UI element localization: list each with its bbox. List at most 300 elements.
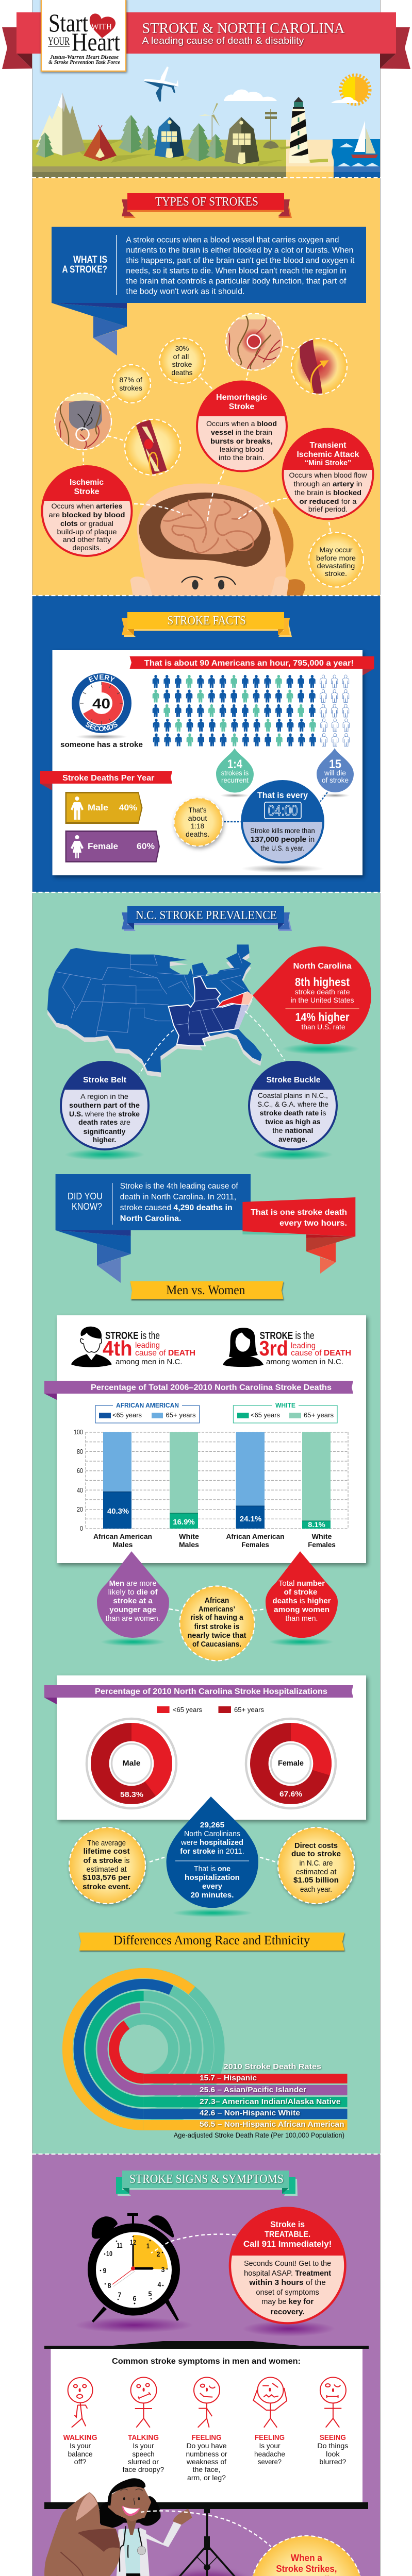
bubble: lifetime cost: The average (87, 1839, 126, 1848)
bubble: when a stroke strikes (251, 2536, 362, 2576)
icon: burst artery (291, 338, 347, 394)
text: seeing: look (326, 2450, 340, 2458)
icon: ground shadows (72, 139, 309, 166)
bar: African American females (236, 1432, 265, 1529)
bubble: African Americans first stroke risk: nearly twice that (188, 1632, 246, 1640)
drop: North Carolina statistics: 14% higher (295, 1010, 350, 1024)
bubble: African Americans first stroke risk: risk of having a (190, 1614, 244, 1622)
legend: African American: 65+ years (166, 1411, 196, 1419)
card: stroke facts (53, 650, 362, 875)
oval: hemorrhagic stroke: Hemorrhagic (216, 393, 267, 402)
text: talking: slurred or (128, 2458, 159, 2466)
callout: did you know: DID YOU (68, 1191, 103, 1201)
oval: stroke belt: southern part of the (69, 1101, 140, 1109)
oval: hemorrhagic stroke: vessel in the brain (211, 428, 272, 436)
bubble: 30 percent of stroke deaths: 30% (175, 344, 189, 352)
region: stroke buckle (234, 1005, 249, 1029)
icon: stick figure numbness (194, 2377, 220, 2428)
bar: White females: 8.1% (308, 1520, 325, 1529)
oval: stroke is treatable: Call 911 Immediately! (243, 2240, 332, 2249)
icon: ischemic brain vessels (55, 393, 112, 452)
drop: North Carolina statistics: in the United States (291, 996, 354, 1004)
icon: blue house (155, 117, 184, 158)
oval: ischemic stroke: build-up of plaque (57, 528, 117, 536)
drop: 15 will die of stroke: will die (324, 769, 346, 777)
oval: stroke is treatable: within 3 hours of the (249, 2278, 326, 2287)
bubble: lifetime cost: stroke event. (83, 1883, 130, 1891)
oval: transient ischemic attack: through an artery in (294, 480, 362, 488)
ribbon: about 90 Americans an hour: That is about 90 Americans an hour, 795,000 a year! (144, 659, 354, 668)
banner: men vs. women: Men vs. Women (166, 1283, 245, 1297)
icon: every 40 seconds clock (72, 673, 131, 739)
oval: stroke is treatable: TREATABLE. (265, 2230, 310, 2239)
panel: symptoms screen (44, 2341, 369, 2502)
icon: every 40 seconds clock: SECONDS (86, 722, 118, 732)
panel: sky and landscape background (32, 0, 381, 178)
connector: blue dashes (224, 792, 327, 822)
oval: ischemic stroke: deposits. (72, 544, 101, 552)
icon: mountain (36, 93, 86, 156)
icon: pants and shoes (110, 2572, 150, 2576)
text: feeling numbness: numbness or (186, 2450, 227, 2458)
chart: male donut: Male (123, 1759, 140, 1768)
callout: did you know: death in North Carolina. In 2011, (120, 1193, 236, 1201)
callout: what is a stroke (52, 227, 366, 355)
legend: White (233, 1401, 337, 1423)
text: walking: WALKING (63, 2433, 97, 2442)
icon: presentation screen tripod (161, 2509, 254, 2576)
bubble: 30 percent of stroke deaths: deaths (171, 368, 193, 377)
text: feeling headache: FEELING (255, 2433, 285, 2442)
bar: White males: 16.9% (173, 1518, 195, 1527)
icon: alarm clock: 8 (107, 2281, 111, 2290)
icon: woman silhouette (223, 1328, 263, 1367)
icon: neck (126, 2519, 137, 2535)
banner: types of strokes (122, 193, 292, 218)
drop: North Carolina statistics: 8th highest (295, 975, 350, 989)
text: stroke 4th leading cause among men: cause of DEATH (135, 1349, 195, 1358)
icon: olive house (224, 117, 259, 164)
logo: Start With Your Heart: Justus-Warren Heart Disease (50, 55, 119, 60)
heading: common symptoms: Common stroke symptoms in men and women: (112, 2357, 301, 2366)
ribbon: percentage of stroke deaths (44, 1381, 353, 1400)
icon: face (108, 2487, 151, 2521)
banner: men vs. women (130, 1281, 284, 1299)
icon: female figure (71, 835, 84, 858)
bubble: about 1 in 18 deaths: That's (189, 806, 206, 814)
ribbon: stroke deaths per year: Stroke Deaths Per Year (62, 774, 155, 783)
oval: stroke buckle (248, 1061, 338, 1160)
callout: one stroke death every two hours: That is one stroke death (251, 1208, 347, 1217)
oval: ischemic stroke: are blocked by blood (48, 511, 125, 519)
bubble: 87 percent of strokes: 87% of (120, 376, 142, 384)
oval: stroke is treatable: may be key for (261, 2297, 314, 2306)
bubble: may occur before stroke: devastating (317, 562, 355, 570)
text: feeling numbness: the face, (193, 2466, 220, 2473)
bar: African American females: 24.1% (240, 1515, 261, 1523)
oval: stroke buckle: average. (278, 1135, 307, 1143)
legend: hospitalizations: <65 years (173, 1706, 202, 1714)
drop: North Carolinians hospitalized: hospitalization (185, 1874, 240, 1882)
bubble: African Americans first stroke risk: first stroke is (194, 1623, 239, 1631)
text: stroke 4th leading cause among men: 4th (103, 1336, 133, 1360)
legend: African American (95, 1401, 200, 1423)
panel: prevalence background (32, 892, 381, 2154)
drop: North Carolina statistics (253, 946, 371, 1055)
oval: stroke belt: Stroke Belt (83, 1076, 127, 1084)
oval: stroke buckle: the national (272, 1126, 313, 1134)
oval: stroke is treatable: hospital ASAP. Treatment (244, 2269, 331, 2278)
illustration: North Carolina landscape (36, 66, 379, 166)
oval: stroke is treatable: onset of symptoms (256, 2288, 319, 2297)
oval: transient ischemic attack: Occurs when blood flow (289, 471, 367, 479)
drop: North Carolinians hospitalized: That is one (194, 1865, 230, 1873)
oval: ischemic stroke: Ischemic (70, 478, 104, 487)
oval: stroke buckle: S.C., & G.A. where the (257, 1100, 328, 1108)
icon: pointing hand (44, 2492, 120, 2576)
drop: 1 in 4 strokes recurrent: 1:4 (227, 757, 243, 771)
icon: raised arm (143, 2522, 182, 2547)
drop: men more likely to die younger: likely to die of (108, 1588, 158, 1597)
icon: male figure (71, 796, 84, 820)
text: stroke 4th leading cause among men (103, 1330, 195, 1366)
bubble: 87 percent of strokes: strokes (120, 384, 142, 392)
text: seeing: blurred? (319, 2458, 346, 2466)
oval: that is every four minutes: the U.S. a year. (261, 844, 304, 852)
bar: African American males (103, 1432, 131, 1529)
oval: transient ischemic attack: Transient (309, 441, 347, 450)
oval: ischemic stroke: Occurs when arteries (52, 502, 123, 510)
drop: North Carolinians hospitalized: North Carolinians (184, 1830, 240, 1838)
icon: clouds (224, 90, 277, 101)
oval: stroke buckle: Coastal plains in N.C., (258, 1091, 328, 1099)
callout: did you know: KNOW? (72, 1201, 102, 1212)
banner: stroke signs and symptoms (116, 2171, 298, 2196)
drop: 15 will die of stroke (317, 748, 354, 798)
section dividers (32, 178, 381, 2576)
drop: total deaths higher among women: among women (274, 1606, 329, 1614)
bubble: direct costs: due to stroke (291, 1850, 341, 1858)
oval: hemorrhagic stroke: leaking blood (220, 445, 263, 453)
oval: ischemic stroke: and other fatty (63, 535, 111, 544)
bubble: direct costs: in N.C. are (299, 1859, 333, 1868)
chart: radial death rates by race: 27.3– American Indian/Alaska Native (200, 2097, 340, 2106)
drop: North Carolinians hospitalized: 20 minutes. (191, 1891, 234, 1900)
text: feeling headache (254, 2433, 285, 2466)
callout: one stroke death every two hours (242, 1197, 355, 1274)
chart: stroke deaths stacked bars: African American (226, 1532, 285, 1540)
oval: hemorrhagic stroke: Occurs when a blood (206, 419, 277, 428)
oval: transient ischemic attack: brief period. (308, 505, 348, 513)
drop: men more likely to die younger: stroke at a (113, 1597, 153, 1605)
logo: Start With Your Heart: & Stroke Prevention Task Force (48, 60, 120, 65)
oval: stroke belt (60, 1061, 150, 1160)
banner: stroke facts: STROKE FACTS (167, 614, 246, 628)
text: talking: speech (132, 2450, 155, 2458)
oval: stroke buckle: stroke death rate is (260, 1109, 326, 1117)
bubble: African Americans first stroke risk: African (205, 1597, 229, 1605)
chart: stroke deaths stacked bars: Females (241, 1540, 269, 1549)
text: feeling numbness: Do you have (187, 2442, 227, 2450)
oval: stroke belt: A region in the (80, 1092, 128, 1100)
icon: trees (36, 115, 225, 161)
banner: differences among race and ethnicity (78, 1933, 344, 1951)
drop: total deaths higher among women (266, 1551, 338, 1646)
text: feeling headache: Is your (259, 2442, 281, 2450)
connector: hospitalization bubbles (150, 1857, 276, 1862)
legend: White: WHITE (275, 1401, 295, 1409)
drop: 1 in 4 strokes recurrent (216, 748, 254, 798)
icon: alarm clock: 3 (161, 2265, 165, 2274)
connector: clock to treatable oval (151, 2234, 236, 2253)
bubble: 30 percent of stroke deaths: of all (173, 352, 189, 361)
chart: radial death rates by race (68, 1973, 347, 2139)
logo: Start With Your Heart: YOUR (48, 35, 70, 47)
oval: hemorrhagic stroke (196, 380, 288, 472)
icon: hair top (108, 2478, 145, 2505)
drop: men more likely to die younger (97, 1551, 169, 1646)
tag: male 40 percent: 40% (119, 803, 137, 812)
legend: African American: <65 years (112, 1411, 142, 1419)
bubble: about 1 in 18 deaths (174, 798, 223, 846)
oval: hemorrhagic stroke: bursts or breaks, (210, 437, 273, 445)
bubble: about 1 in 18 deaths: about (188, 814, 207, 822)
illustration: head with exposed brain (130, 484, 305, 596)
bubble: when a stroke strikes: Stroke Strikes, (276, 2564, 337, 2574)
text: stroke 3rd leading cause among women: STROKE is the (260, 1330, 315, 1342)
legend: African American: AFRICAN AMERICAN (116, 1401, 179, 1409)
oval: stroke buckle: twice as high as (265, 1117, 321, 1126)
chart: radial death rates by race: 25.6 – Asian/Pacific Islander (200, 2086, 306, 2094)
icon: alarm clock: 1 (146, 2242, 150, 2250)
icon: lighthouse (288, 97, 328, 163)
text: talking (123, 2433, 164, 2473)
drop: 15 will die of stroke: of stroke (322, 776, 349, 784)
chart: female donut: Female (278, 1759, 304, 1768)
bar: African American males: 40.3% (107, 1507, 129, 1516)
bubble: 30 percent of stroke deaths (160, 338, 205, 383)
callout: one stroke death every two hours: every two hours. (279, 1219, 347, 1228)
bubble: about 1 in 18 deaths: 1:18 (191, 822, 204, 830)
icon: alarm clock: 12 (130, 2238, 136, 2246)
icon: smile (122, 2505, 140, 2516)
connector lines: types of strokes (83, 344, 331, 532)
text: seeing: SEEING (320, 2433, 346, 2442)
ribbon: stroke deaths per year (40, 771, 172, 790)
text: walking: balance (68, 2450, 93, 2458)
callout: did you know: stroke caused 4,290 deaths in (120, 1204, 233, 1212)
text: feeling numbness: arm, or leg? (187, 2474, 226, 2482)
icon: man silhouette (71, 1327, 112, 1367)
icon: eyes and brows (123, 2497, 125, 2500)
ribbon: about 90 Americans an hour (130, 656, 374, 675)
drop: total deaths higher among women: than men. (286, 1615, 318, 1623)
icon: wind turbine (199, 103, 220, 145)
connector: map to belt and buckle (139, 1011, 285, 1074)
bubble: when a stroke strikes: When a (291, 2553, 323, 2563)
arc: Hispanic (114, 2025, 144, 2078)
bubble: about 1 in 18 deaths: deaths. (186, 830, 209, 838)
oval: that is every four minutes: 137,000 people in (251, 836, 315, 844)
ribbon: percentage of hospitalizations: Percentage of 2010 North Carolina Stroke Hospitalizations (95, 1687, 327, 1696)
panel: stroke facts background (32, 596, 381, 892)
arc: American Indian/Alaska Native (91, 1996, 144, 2102)
chart: stroke deaths stacked bars: Males (112, 1540, 133, 1549)
icon: airplane (144, 66, 178, 101)
oval: stroke belt: U.S. where the stroke (69, 1110, 140, 1118)
icon: stick figure blurred vision (320, 2377, 346, 2428)
chart: radial death rates by race: 42.6 – Non-Hispanic White (200, 2109, 300, 2117)
oval: transient ischemic attack: Ischemic Attack (297, 450, 359, 459)
icon: stick figure talking (131, 2377, 157, 2428)
drop: North Carolinians hospitalized: 29,265 (200, 1821, 224, 1829)
drop: North Carolina statistics: North Carolina (293, 962, 352, 971)
text: stroke 3rd leading cause among women (259, 1330, 351, 1366)
icon: stick figure headache (253, 2377, 287, 2428)
bubble: may occur before stroke (309, 533, 364, 587)
tag: female 60 percent: 60% (137, 841, 155, 851)
callout: did you know (56, 1174, 251, 1283)
icon: alarm clock: 10 (106, 2249, 112, 2258)
callout: what is a stroke: A STROKE? (62, 264, 107, 275)
arc: Non-Hispanic African American (68, 1973, 192, 2125)
drop: North Carolinians hospitalized (166, 1797, 258, 1917)
oval: that is every four minutes: Stroke kills more than (250, 827, 315, 835)
oval: ischemic stroke: Stroke (74, 487, 100, 496)
text: walking: off? (74, 2458, 87, 2466)
drop: 1 in 4 strokes recurrent: recurrent (221, 776, 249, 784)
chart: radial death rates by race: 15.7 – Hispanic (200, 2074, 257, 2082)
definition text (126, 236, 355, 296)
drop: total deaths higher among women: deaths is higher (272, 1597, 331, 1605)
bubble: 87 percent of strokes (112, 365, 151, 403)
drop: North Carolina statistics: stroke death rate (295, 988, 350, 996)
bubble: lifetime cost: of a stroke is (84, 1857, 130, 1865)
oval: ischemic stroke: clots or gradual (60, 519, 113, 528)
tag: male 40 percent (65, 792, 142, 824)
icon: alarm clock: 11 (117, 2241, 123, 2249)
heading: WHAT IS (73, 255, 107, 265)
drop: 15 will die of stroke: 15 (329, 757, 341, 771)
logo: Start With Your Heart: WITH (91, 23, 112, 31)
definition text: needs, so it starts to die. When blood can't reach the region in (126, 267, 346, 275)
text: stroke 4th leading cause among men: among men in N.C. (116, 1358, 183, 1366)
icon: every 40 seconds clock: EVERY (88, 674, 116, 682)
oval: that is every four minutes (241, 780, 324, 873)
chart: stroke deaths stacked bars (74, 1429, 348, 1549)
drop: men more likely to die younger: younger age (109, 1606, 156, 1614)
bubble: lifetime cost: estimated at (87, 1866, 127, 1874)
icon: stick figure walking (68, 2378, 93, 2428)
bubble: lifetime cost (69, 1827, 145, 1904)
logo: Start With Your Heart (41, 0, 126, 71)
chart: stroke deaths stacked bars: 80 (77, 1448, 83, 1455)
icon: alarm clock: 5 (149, 2290, 152, 2298)
banner: stroke facts (122, 612, 292, 637)
definition text: the body won't work as it should. (126, 287, 244, 296)
card: men vs. women deaths (57, 1315, 366, 1563)
bubble: may occur before stroke: before more (316, 554, 356, 562)
oval: stroke is treatable: recovery. (271, 2308, 305, 2316)
drop: men more likely to die younger: Men are more (109, 1580, 157, 1588)
arc: Non-Hispanic White (79, 1984, 171, 2114)
connector: ovals to brain (134, 493, 287, 523)
icon: digital clock: 04:00 (268, 803, 298, 819)
chart: stroke deaths stacked bars: 20 (77, 1506, 83, 1513)
oval: transient ischemic attack: “Mini Stroke” (305, 459, 351, 467)
banner: N.C. stroke prevalence (122, 906, 292, 931)
icon: alarm clock: 9 (103, 2266, 107, 2275)
icon: alarm clock: 6 (133, 2294, 137, 2302)
definition text: nutrients to the brain is either blocked by a clot or bursts. When (126, 246, 353, 255)
screen bottom bar (44, 2502, 368, 2509)
text: stroke 4th leading cause among men: STROKE is the (105, 1330, 160, 1342)
map: United States stroke belt (47, 944, 262, 1077)
chart: female donut: 67.6% (279, 1790, 302, 1799)
drop: 1 in 4 strokes recurrent: strokes is (221, 769, 249, 777)
definition text: A stroke occurs when a blood vessel that carries oxygen and (126, 236, 339, 244)
icon: utility pole (263, 109, 279, 149)
oval: stroke is treatable (229, 2207, 347, 2336)
text: talking: face droopy? (123, 2466, 164, 2473)
header ribbon (2, 12, 410, 69)
oval: hemorrhagic stroke: into the brain. (219, 453, 265, 462)
legend: White: <65 years (251, 1411, 280, 1419)
drop: North Carolinians hospitalized: were hospitalized (180, 1839, 243, 1847)
text: stroke 3rd leading cause among women: 3rd (259, 1336, 288, 1360)
icon: tepee (84, 125, 117, 161)
text: stroke 3rd leading cause among women: cause of DEATH (291, 1349, 351, 1358)
ribbon: percentage of stroke deaths: Percentage of Total 2006–2010 North Carolina Stroke Deaths (91, 1383, 332, 1392)
drop: North Carolina statistics: than U.S. rate (301, 1023, 345, 1031)
chart: stroke deaths stacked bars: Males (179, 1540, 199, 1549)
icon: hemorrhagic brain vessels (226, 313, 283, 371)
icon: alarm clock: 7 (118, 2291, 122, 2299)
bubble: direct costs: $1.05 billion (293, 1876, 339, 1885)
chart: radial death rates by race: Age-adjusted Stroke Death Rate (Per 100,000 Population) (174, 2131, 344, 2139)
oval: stroke belt: higher. (93, 1136, 116, 1144)
bubble: may occur before stroke: May occur (320, 546, 353, 554)
oval: stroke is treatable: Seconds Count! Get to the (244, 2259, 331, 2268)
icon: alarm clock: 2 (157, 2250, 160, 2258)
ribbon: percentage of hospitalizations (44, 1685, 353, 1704)
subtitle: A leading cause of death & disability (142, 36, 304, 46)
logo: Start With Your Heart: Heart (72, 27, 120, 56)
oval: ischemic stroke (41, 465, 133, 557)
chart: male donut: 58.3% (120, 1790, 143, 1799)
icon: doctor hair back (98, 2496, 161, 2528)
icon: every 40 seconds clock: 40 (92, 696, 110, 711)
icon: sailboat and waves (337, 121, 379, 166)
bubble: direct costs: estimated at (296, 1868, 336, 1876)
icon: lab coat (114, 2528, 152, 2576)
drop: men more likely to die younger: than are women. (106, 1615, 160, 1623)
icon: alarm clock (75, 2213, 193, 2333)
text: feeling numbness (186, 2433, 227, 2482)
chart: stroke deaths stacked bars: 100 (74, 1429, 83, 1436)
text: stroke 3rd leading cause among women: leading (291, 1342, 316, 1350)
banner: differences among race and ethnicity: Differences Among Race and Ethnicity (113, 1934, 310, 1947)
text: stroke 4th leading cause among men: leading (135, 1341, 160, 1350)
oval: stroke is treatable: Stroke is (270, 2220, 305, 2229)
chart: stroke deaths stacked bars: White (179, 1532, 199, 1540)
chart: male donut (87, 1719, 176, 1808)
icon: shirt (120, 2529, 142, 2573)
text: feeling numbness: weakness of (186, 2458, 226, 2466)
bubble: African Americans first stroke risk: Americans’ (199, 1605, 235, 1614)
icon: blocked artery with clot (125, 419, 180, 475)
chart: stroke deaths stacked bars: African American (93, 1532, 152, 1540)
